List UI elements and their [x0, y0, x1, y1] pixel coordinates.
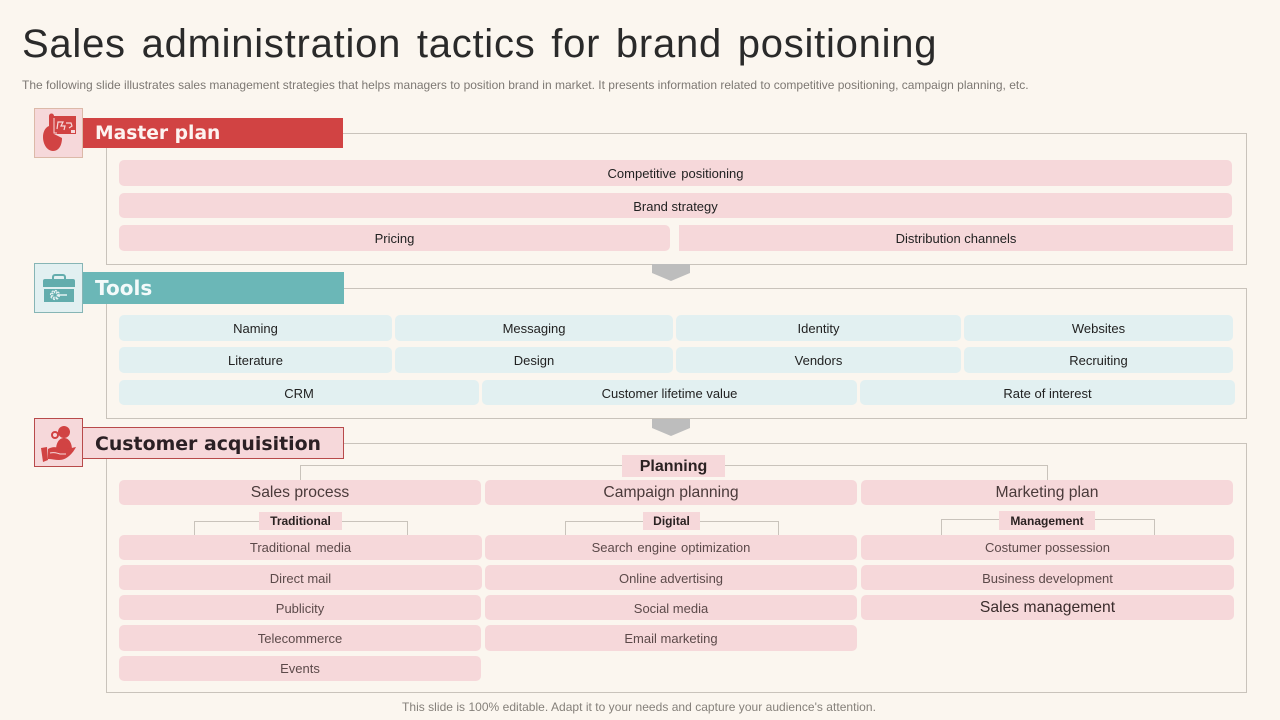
- label: traditional: [259, 512, 342, 530]
- heading: tools: Tools: [95, 276, 152, 300]
- cell: naming: [119, 315, 392, 341]
- item: online advertising: Online advertising: [619, 570, 723, 586]
- cell: pricing: Pricing: [375, 230, 414, 246]
- cell: vendors: Vendors: [795, 352, 842, 368]
- connector: management: [941, 519, 1155, 535]
- item: publicity: Publicity: [276, 600, 324, 616]
- cell: recruiting: [964, 347, 1233, 373]
- panel: master plan: [106, 133, 1247, 265]
- column header: sales process: [119, 480, 481, 505]
- item: traditional media: [119, 535, 482, 560]
- cell: literature: [119, 347, 392, 373]
- item: costumer possession: Costumer possession: [985, 540, 1110, 555]
- cell: recruiting: Recruiting: [1069, 352, 1128, 368]
- arrow: tools to customer acquisition: [652, 419, 690, 436]
- label: management: [999, 511, 1095, 530]
- label: digital: [643, 512, 700, 530]
- item: social media: [485, 595, 857, 620]
- cell: naming: Naming: [233, 320, 278, 336]
- cell: rate of interest: Rate of interest: [1003, 386, 1092, 400]
- item: direct mail: Direct mail: [270, 570, 331, 586]
- item: business development: Business development: [982, 570, 1113, 586]
- cell: rate of interest: [860, 380, 1235, 405]
- panel: customer acquisition: [106, 443, 1247, 693]
- cell: messaging: [395, 315, 673, 341]
- arrow: master plan to tools: [652, 264, 690, 281]
- item: events: [119, 656, 481, 681]
- icon: customer acquisition: [34, 418, 83, 467]
- cell: identity: Identity: [798, 320, 839, 336]
- cell: messaging: Messaging: [503, 320, 565, 336]
- connector: traditional: [194, 521, 408, 535]
- cell: crm: CRM: [284, 386, 314, 400]
- item: social media: Social media: [634, 600, 708, 616]
- cell: customer lifetime value: [482, 380, 857, 405]
- cell: vendors: [676, 347, 961, 373]
- item: search engine optimization: [485, 535, 857, 560]
- cell: websites: [964, 315, 1233, 341]
- item: online advertising: [485, 565, 857, 590]
- item: publicity: [119, 595, 481, 620]
- cell: websites: Websites: [1072, 320, 1125, 336]
- subtitle: The following slide illustrates sales management strategies that helps managers to position brand in market. It presents information related to competitive positioning, campaign planning, etc.: [22, 78, 1029, 92]
- footer note: This slide is 100% editable. Adapt it to your needs and capture your audience's attention.: [402, 700, 876, 714]
- panel: tools: [106, 288, 1247, 419]
- heading: customer acquisition: Customer acquisition: [95, 432, 321, 454]
- heading: tools: [83, 272, 344, 304]
- row: brand strategy: Brand strategy: [633, 198, 718, 214]
- item: costumer possession: [861, 535, 1234, 560]
- cell: design: Design: [514, 352, 554, 368]
- column header: marketing plan: [861, 480, 1233, 505]
- item: traditional media: Traditional media: [250, 540, 351, 555]
- row: competitive positioning: [119, 160, 1232, 186]
- item: telecommerce: Telecommerce: [258, 630, 342, 646]
- column header: marketing plan: Marketing plan: [996, 484, 1098, 501]
- cell: distribution channels: [679, 225, 1233, 251]
- item: email marketing: Email marketing: [624, 630, 718, 646]
- cell: literature: Literature: [228, 352, 283, 368]
- row: competitive positioning: Competitive positioning: [608, 166, 743, 180]
- connector: planning: [300, 465, 1048, 480]
- cell: design: [395, 347, 673, 373]
- label: planning: Planning: [640, 458, 707, 474]
- item: search engine optimization: Search engine optimization: [592, 540, 750, 555]
- column header: sales process: Sales process: [251, 484, 349, 501]
- item: telecommerce: [119, 625, 481, 651]
- label: traditional: Traditional: [270, 514, 331, 528]
- icon: master plan: [34, 108, 83, 158]
- row: brand strategy: [119, 193, 1232, 218]
- item: sales management: [861, 595, 1234, 620]
- cell: pricing: [119, 225, 670, 251]
- cell: customer lifetime value: Customer lifetime value: [602, 386, 737, 400]
- cell: crm: [119, 380, 479, 405]
- heading: master plan: Master plan: [95, 123, 220, 144]
- item: sales management: Sales management: [980, 599, 1115, 616]
- icon: tools: [34, 263, 83, 313]
- item: business development: [861, 565, 1234, 590]
- heading: master plan: [83, 118, 343, 148]
- column header: campaign planning: Campaign planning: [603, 484, 739, 501]
- cell: distribution channels: Distribution channels: [896, 230, 1016, 246]
- label: planning: [622, 455, 725, 477]
- cell: identity: [676, 315, 961, 341]
- label: digital: Digital: [653, 514, 690, 528]
- label: management: Management: [1010, 514, 1084, 528]
- item: direct mail: [119, 565, 482, 590]
- connector: digital: [565, 521, 779, 535]
- title: Sales administration tactics for brand positioning: [22, 22, 937, 66]
- column header: campaign planning: [485, 480, 857, 505]
- item: events: Events: [280, 661, 320, 676]
- item: email marketing: [485, 625, 857, 651]
- heading: customer acquisition: [82, 427, 344, 459]
